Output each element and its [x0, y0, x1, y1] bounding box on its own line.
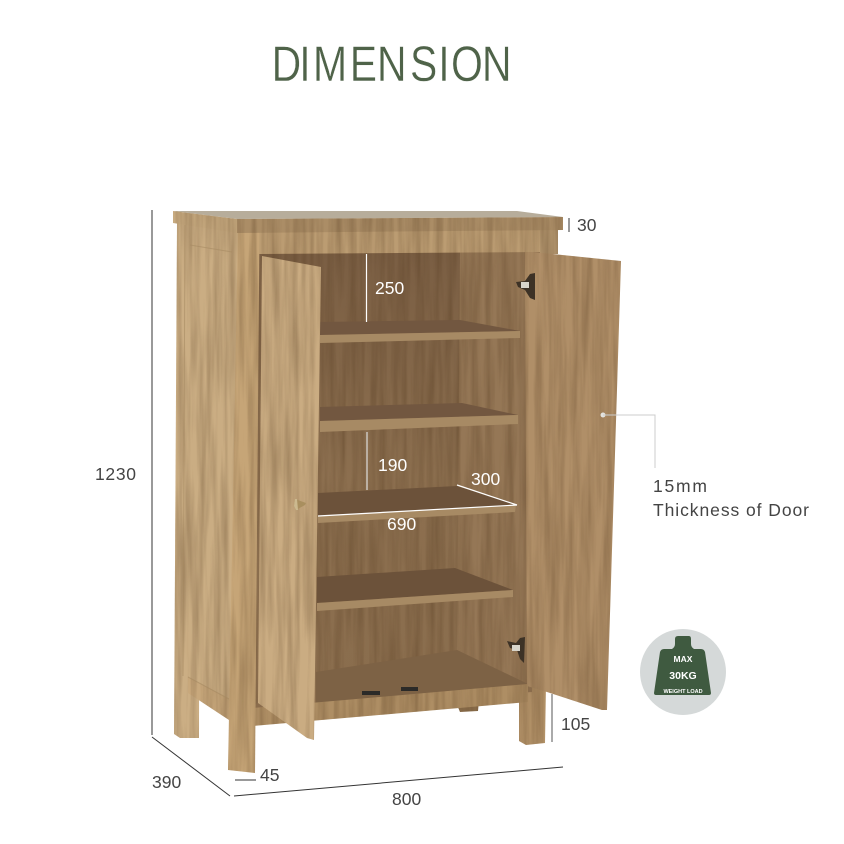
- shelf 1: [320, 320, 520, 335]
- interior back wall: [254, 250, 530, 704]
- dimension: shelf gap 190: 190: [378, 455, 407, 475]
- left door: [258, 256, 321, 740]
- dimension: height 1230: 1230: [95, 464, 136, 484]
- dimension: leg 45: 45: [260, 765, 279, 785]
- shelf 3: [318, 486, 516, 516]
- badge: max weight load: 30KG: [669, 670, 697, 682]
- dimension: shelf depth 300: [457, 469, 517, 505]
- dimension: leg height 105: 105: [561, 714, 590, 734]
- top hinge: [516, 273, 535, 300]
- shelf 4: [317, 568, 513, 603]
- badge: max weight load: WEIGHT LOAD: [663, 689, 703, 695]
- front frame: [173, 211, 563, 773]
- bottom hinge: [507, 637, 525, 663]
- dimension: depth 390: 390: [152, 772, 181, 792]
- interior right wall: [457, 250, 530, 688]
- dimension: shelf depth 300: 300: [471, 469, 500, 489]
- callout: door thickness: Thickness of Door: [653, 500, 809, 520]
- shelf clips: [362, 687, 418, 695]
- right post: [540, 228, 558, 254]
- badge: max weight load: [640, 629, 726, 715]
- side panel: [177, 222, 242, 722]
- callout: door thickness: [600, 412, 809, 520]
- door handle: [294, 499, 306, 510]
- icon: weight: [654, 636, 711, 695]
- dimension: depth 390: [152, 737, 230, 796]
- cabinet: [173, 211, 621, 773]
- top board side: [173, 211, 237, 233]
- dimension: leg height 105: [552, 694, 590, 742]
- dimension: width 800: [234, 767, 563, 809]
- callout: door thickness: 15mm: [653, 476, 707, 496]
- back feet and legs: [174, 222, 546, 745]
- badge: max weight load: MAX: [674, 654, 693, 664]
- dimension: shelf gap 190: [367, 432, 407, 490]
- dimension: shelf width 690: [318, 505, 517, 534]
- top surface: [173, 211, 563, 219]
- bottom rail: [253, 684, 528, 726]
- top board front: [237, 217, 563, 233]
- shelves: [316, 320, 528, 708]
- right door: [525, 252, 621, 710]
- dimension: shelf gap 250: [366, 254, 404, 322]
- interior base: [254, 248, 542, 712]
- dimension: width 800: 800: [392, 789, 421, 809]
- title: DIMENSION: [272, 36, 512, 92]
- top rail: [258, 228, 542, 254]
- shelf 2: [320, 403, 518, 421]
- dimension: shelf width 690: 690: [387, 514, 416, 534]
- dimension: top 30: 30: [577, 215, 597, 235]
- dimension: leg 45: [235, 765, 279, 785]
- dimension: shelf gap 250: 250: [375, 278, 404, 298]
- left post: [228, 228, 260, 773]
- side panel recess: [183, 225, 232, 699]
- bottom shelf: [316, 650, 528, 708]
